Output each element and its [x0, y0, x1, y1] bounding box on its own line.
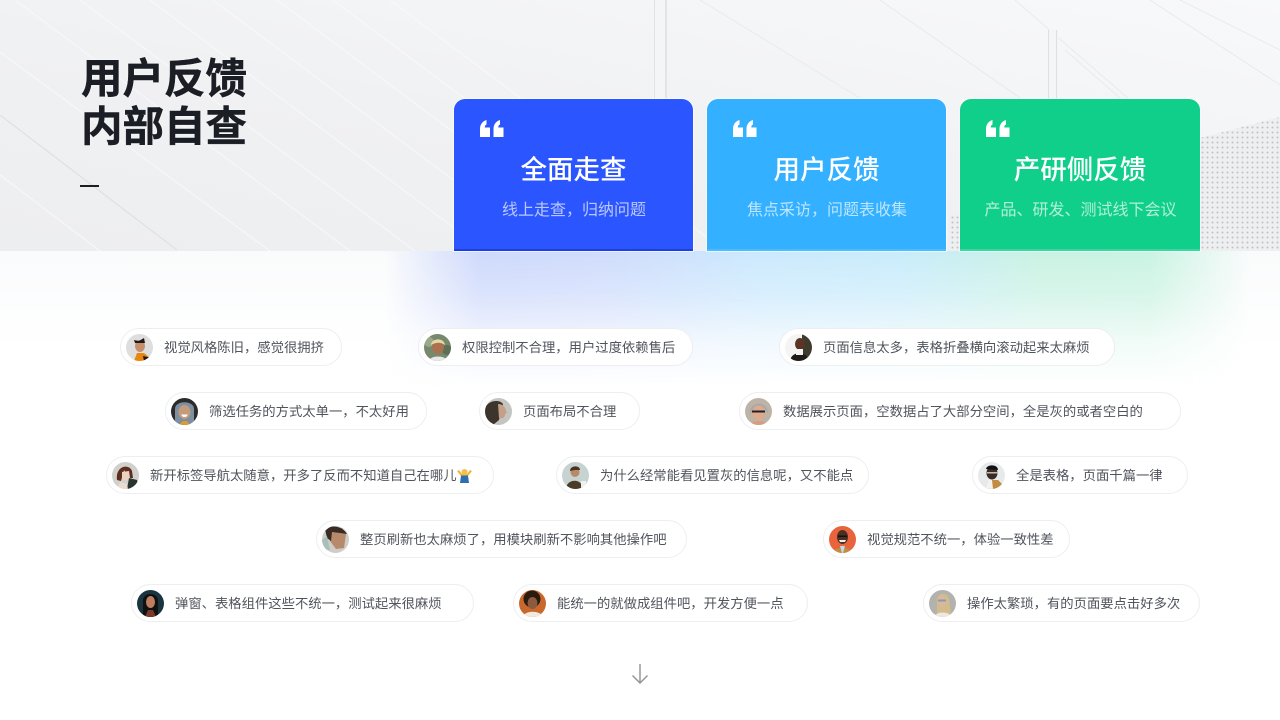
feedback pill: 视觉规范不统一	[823, 520, 1070, 558]
feedback pill: 能统一的就做成组件吧	[513, 584, 808, 622]
arrow: down	[632, 664, 648, 684]
feedback pill: 视觉规范不统一: 视觉规范不统一，体验一致性差	[867, 532, 1054, 547]
feedback pill: 操作太繁琐: 操作太繁琐，有的页面要点击好多次	[967, 596, 1180, 611]
feedback pill: 全是表格	[972, 456, 1188, 494]
card: 用户反馈: 用户反馈	[774, 155, 880, 185]
feedback pill: 权限控制不合理: 权限控制不合理，用户过度依赖售后	[462, 340, 675, 355]
feedback pill: 数据展示页面: 数据展示页面，空数据占了大部分空间，全是灰的或者空白的	[783, 404, 1143, 419]
card: 产研侧反馈: 产研侧反馈	[1014, 155, 1146, 185]
feedback pill: 页面布局不合理: 页面布局不合理	[523, 404, 616, 419]
feedback pill: 全是表格: 全是表格，页面千篇一律	[1016, 468, 1163, 483]
feedback pill: 页面布局不合理	[479, 392, 640, 430]
feedback pill: 视觉风格陈旧	[120, 328, 342, 366]
feedback pill: 筛选任务	[165, 392, 427, 430]
icon: shrug emoji	[457, 469, 472, 483]
title	[81, 55, 247, 150]
feedback pill: 页面信息太多	[779, 328, 1115, 366]
feedback pill: 整页刷新: 整页刷新也太麻烦了，用模块刷新不影响其他操作吧	[360, 532, 667, 547]
feedback pill: 为什么经常能看见置灰	[556, 456, 869, 494]
title dash	[80, 185, 99, 187]
card: 全面走查: 线上走查，归纳问题	[502, 202, 646, 219]
feedback pill: 新开标签: 新开标签导航太随意，开多了反而不知道自己在哪儿	[150, 468, 457, 483]
feedback pill: 操作太繁琐	[923, 584, 1200, 622]
card: 用户反馈: 焦点采访，问题表收集	[747, 202, 907, 219]
feedback pill: 筛选任务: 筛选任务的方式太单一，不太好用	[209, 404, 409, 419]
feedback pill: 弹窗、表格组件	[131, 584, 474, 622]
card: 全面走查: 全面走查	[520, 155, 626, 185]
card: 全面走查	[454, 99, 693, 251]
feedback pill: 数据展示页面	[739, 392, 1181, 430]
title: 内部自查	[81, 103, 247, 150]
icon: quote	[733, 120, 756, 137]
card: 用户反馈	[707, 99, 946, 251]
feedback pill: 能统一的就做成组件吧: 能统一的就做成组件吧，开发方便一点	[557, 596, 784, 611]
feedback pill: 弹窗、表格组件: 弹窗、表格组件这些不统一，测试起来很麻烦	[175, 596, 442, 611]
feedback pill: 为什么经常能看见置灰: 为什么经常能看见置灰的信息呢，又不能点	[600, 468, 853, 483]
card: 产研侧反馈	[960, 99, 1200, 251]
icon: quote	[986, 120, 1010, 137]
feedback pill: 页面信息太多: 页面信息太多，表格折叠横向滚动起来太麻烦	[823, 340, 1090, 355]
feedback pill: 整页刷新	[316, 520, 687, 558]
feedback pill: 新开标签	[106, 456, 494, 494]
title: 用户反馈	[81, 55, 247, 102]
feedback pill: 视觉风格陈旧: 视觉风格陈旧，感觉很拥挤	[164, 340, 324, 355]
card: 产研侧反馈: 产品、研发、测试线下会议	[984, 202, 1176, 219]
feedback pill: 权限控制不合理	[418, 328, 693, 366]
header background photo	[0, 0, 1280, 251]
lower section background	[391, 251, 1244, 361]
icon: quote	[480, 120, 504, 137]
